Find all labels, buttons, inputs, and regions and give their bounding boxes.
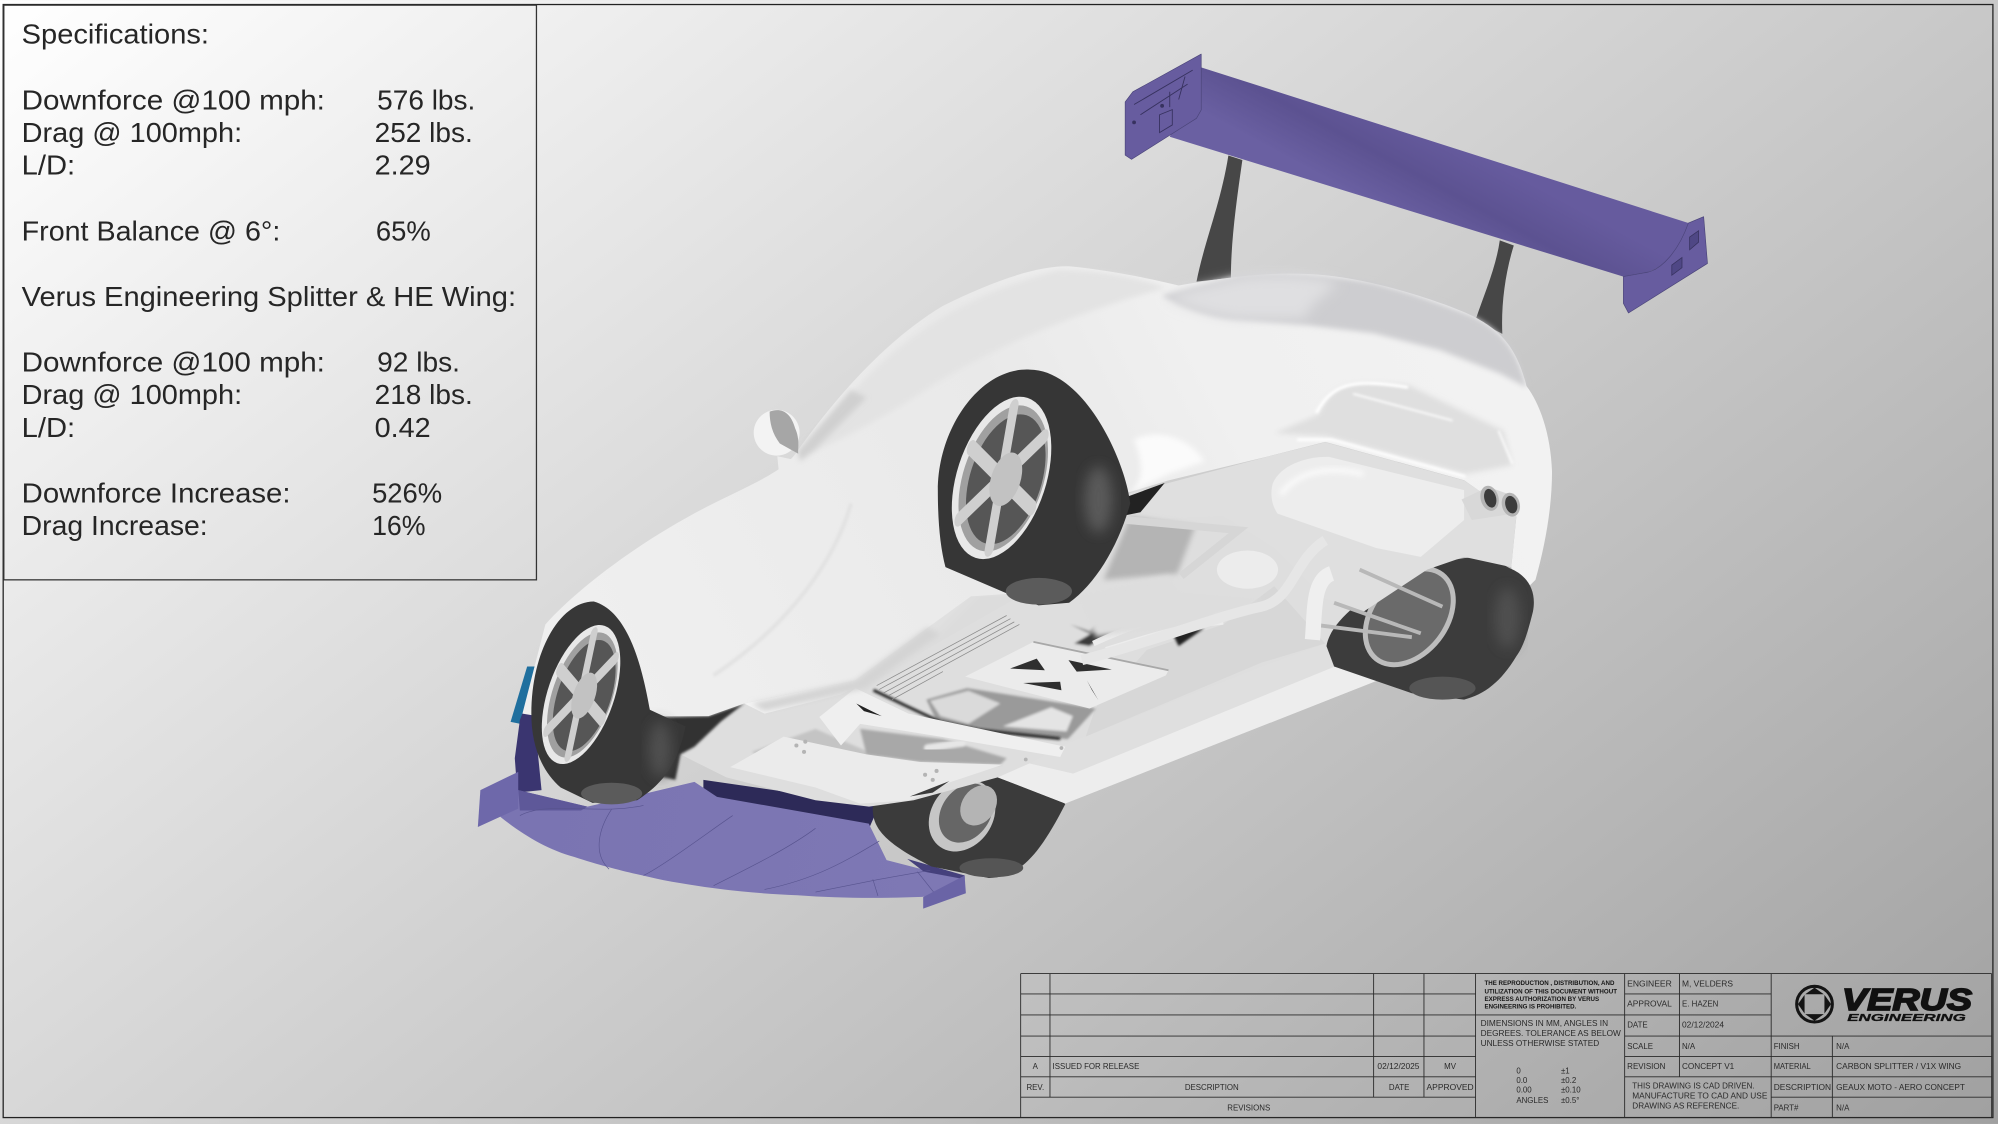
near front wheel: [526, 602, 686, 804]
reproduction notice: ENGINEERING IS PROHIBITED.: [1484, 1004, 1576, 1011]
door crease: [714, 503, 851, 675]
part info: N/A: [1836, 1104, 1850, 1113]
pillar shadow: [798, 390, 866, 461]
roof shading: [803, 270, 1166, 456]
outer floor band: [998, 666, 1377, 803]
rear underside shell: [1125, 442, 1516, 612]
far rear wheel: [1326, 548, 1534, 700]
part info: DESCRIPTION: [1774, 1083, 1831, 1092]
engineering info: MANUFACTURE TO CAD AND USE: [1632, 1091, 1767, 1100]
tolerance note: ±0.5°: [1561, 1096, 1579, 1105]
engineering info: APPROVAL: [1627, 1000, 1672, 1009]
wheel well wedge: [1121, 483, 1165, 516]
tolerance note: [1481, 1019, 1621, 1105]
engineering info: REVISION: [1627, 1062, 1666, 1071]
specs: baseline car: 2.29: [375, 150, 431, 181]
engineering info: M, VELDERS: [1682, 979, 1733, 988]
engineering info: THIS DRAWING IS CAD DRIVEN.: [1632, 1081, 1755, 1090]
near rear wheel: [933, 370, 1130, 605]
tolerance note: 0.00: [1516, 1086, 1532, 1095]
Verus Engineering logo: VERUS: [1842, 983, 1973, 1017]
revisions table: DATE: [1389, 1083, 1409, 1092]
subframe slit: [910, 781, 949, 796]
specs: splitter and wing: L/D:: [22, 412, 75, 443]
revisions table: 02/12/2025: [1377, 1062, 1420, 1071]
specifications panel: [4, 5, 536, 580]
engine and transmission: [752, 589, 1204, 785]
long tubes: [1093, 612, 1223, 650]
far front wheel: [873, 767, 1065, 878]
splitter surface lines: [520, 805, 937, 896]
specs: baseline car: Downforce @100 mph:: [22, 85, 325, 116]
floor: [680, 491, 1377, 807]
splitter dark rear edge: [907, 859, 965, 879]
exhaust and rear suspension: [1078, 442, 1534, 700]
rear fender recess: [1274, 383, 1513, 477]
engineering info: N/A: [1682, 1042, 1696, 1051]
specs: baseline car: 576 lbs.: [377, 85, 475, 116]
specs: increases: Drag Increase:: [22, 510, 208, 541]
specs: splitter and wing: 0.42: [375, 412, 431, 443]
reproduction notice: THE REPRODUCTION , DISTRIBUTION, AND: [1484, 980, 1615, 987]
splitter dark strip: [703, 780, 879, 828]
specs: splitter and wing: 218 lbs.: [375, 379, 473, 410]
tolerance note: ±1: [1561, 1067, 1570, 1076]
engineering info: CONCEPT V1: [1682, 1062, 1734, 1071]
wing uprights: [1197, 156, 1514, 334]
front cross brace: [819, 688, 1065, 757]
spec: front balance: 65%: [376, 215, 431, 246]
specs: increases: 16%: [372, 510, 426, 541]
specs: splitter and wing: Drag @ 100mph:: [22, 379, 242, 410]
revisions table: APPROVED: [1427, 1083, 1474, 1092]
tolerance note: UNLESS OTHERWISE STATED: [1481, 1039, 1599, 1048]
part info: CARBON SPLITTER / V1X WING: [1836, 1062, 1961, 1071]
wing right endplate: [1623, 217, 1707, 313]
specs: splitter and wing: [22, 347, 473, 443]
spec: front balance: [22, 215, 431, 246]
revisions table: REVISIONS: [1227, 1104, 1270, 1113]
title block: [1021, 974, 1992, 1118]
specs: increases: 526%: [372, 478, 442, 509]
logo icon: [1797, 986, 1832, 1022]
rear deck shading: [1162, 274, 1527, 387]
tolerance note: ±0.10: [1561, 1086, 1581, 1095]
splitter blade: [500, 782, 965, 898]
part info: PART#: [1774, 1104, 1799, 1113]
right dive plane: [923, 875, 966, 909]
rear arch gap shading: [1103, 516, 1195, 580]
specs: increases: [22, 478, 442, 541]
fender highlight: [1128, 435, 1204, 494]
spec: front balance: Front Balance @ 6°:: [22, 215, 280, 246]
splitter inner fold: [518, 790, 587, 810]
reproduction notice: [1484, 980, 1617, 1011]
panel border: [4, 5, 536, 580]
revisions table: DESCRIPTION: [1185, 1083, 1239, 1092]
engineering info: [1627, 979, 1767, 1111]
exhaust pipe: [1082, 540, 1325, 660]
X brace: [965, 642, 1168, 709]
wing: [1125, 54, 1707, 313]
revisions table: [1026, 1062, 1474, 1113]
specs: splitter and wing: 92 lbs.: [377, 347, 460, 378]
revisions table: MV: [1444, 1062, 1457, 1071]
revisions table: REV.: [1026, 1083, 1044, 1092]
specs: baseline car: Drag @ 100mph:: [22, 117, 242, 148]
wing main plane: [1170, 67, 1691, 277]
front subframe plate: [730, 737, 1003, 804]
exhaust tips: [1462, 484, 1523, 520]
tolerance note: DEGREES. TOLERANCE AS BELOW: [1481, 1029, 1621, 1038]
floor tray: [1086, 586, 1325, 737]
revisions table: ISSUED FOR RELEASE: [1053, 1062, 1139, 1071]
engineering info: 02/12/2024: [1682, 1021, 1725, 1030]
reproduction notice: EXPRESS AUTHORIZATION BY VERUS: [1484, 996, 1599, 1003]
engineering info: SCALE: [1627, 1042, 1653, 1051]
dark engine shadow line: [873, 690, 1060, 739]
revisions table: A: [1033, 1062, 1039, 1071]
tolerance note: ANGLES: [1516, 1096, 1548, 1105]
engineering info: ENGINEER: [1627, 979, 1672, 988]
cylinder highlight: [928, 743, 962, 748]
engineering info: DRAWING AS REFERENCE.: [1632, 1102, 1739, 1111]
trailing arm: [1125, 520, 1239, 576]
tolerance note: 0.0: [1516, 1076, 1528, 1085]
engineering info: DATE: [1627, 1021, 1648, 1030]
mirror: [754, 390, 866, 482]
tolerance note: DIMENSIONS IN MM, ANGLES IN: [1481, 1019, 1608, 1028]
sill band with shading: [744, 596, 1019, 714]
part info: MATERIAL: [1774, 1062, 1811, 1071]
ribbed floor section: [877, 616, 1019, 700]
differential: [1217, 551, 1278, 589]
rear axle housing: [1078, 576, 1261, 637]
part info: FINISH: [1774, 1042, 1800, 1051]
muffler: [1271, 457, 1464, 557]
hanger bracket: [1312, 573, 1332, 640]
tolerance note: ±0.2: [1561, 1076, 1576, 1085]
heading: splitter and wing: Verus Engineering Splitter & HE Wing:: [22, 281, 516, 312]
Verus Engineering logo: ENGINEERING: [1847, 1013, 1966, 1024]
specs: baseline car: [22, 85, 475, 181]
engineering info: E. HAZEN: [1682, 1000, 1719, 1009]
fender canard dark: [515, 645, 549, 793]
body shell: [522, 266, 1552, 726]
car with splitter and wing: [478, 54, 1707, 909]
part info: GEAUX MOTO - AERO CONCEPT: [1836, 1083, 1965, 1092]
title block grid: [1021, 974, 1992, 1118]
specs: baseline car: 252 lbs.: [375, 117, 473, 148]
sill shadow: [752, 627, 940, 711]
underbody: [652, 491, 1377, 807]
left dive plane: [478, 772, 518, 827]
specs: splitter and wing: Downforce @100 mph:: [22, 347, 325, 378]
subframe bolts: [794, 740, 1063, 782]
tolerance note: 0: [1516, 1067, 1521, 1076]
rear window highlight: [1166, 276, 1338, 319]
front splitter: [478, 645, 966, 909]
reproduction notice: UTILIZATION OF THIS DOCUMENT WITHOUT: [1484, 988, 1617, 995]
suspension arms: [1312, 570, 1442, 637]
Verus Engineering logo: [1797, 983, 1973, 1024]
specs: increases: Downforce Increase:: [22, 478, 291, 509]
part info: [1774, 1042, 1965, 1113]
part info: N/A: [1836, 1042, 1850, 1051]
middle floor band: [1030, 644, 1338, 774]
heading: specifications: Specifications:: [22, 18, 209, 49]
canard blue: [511, 666, 535, 724]
specs: baseline car: L/D:: [22, 150, 75, 181]
wing left endplate: [1125, 54, 1201, 159]
dark wheel well: [652, 703, 744, 780]
